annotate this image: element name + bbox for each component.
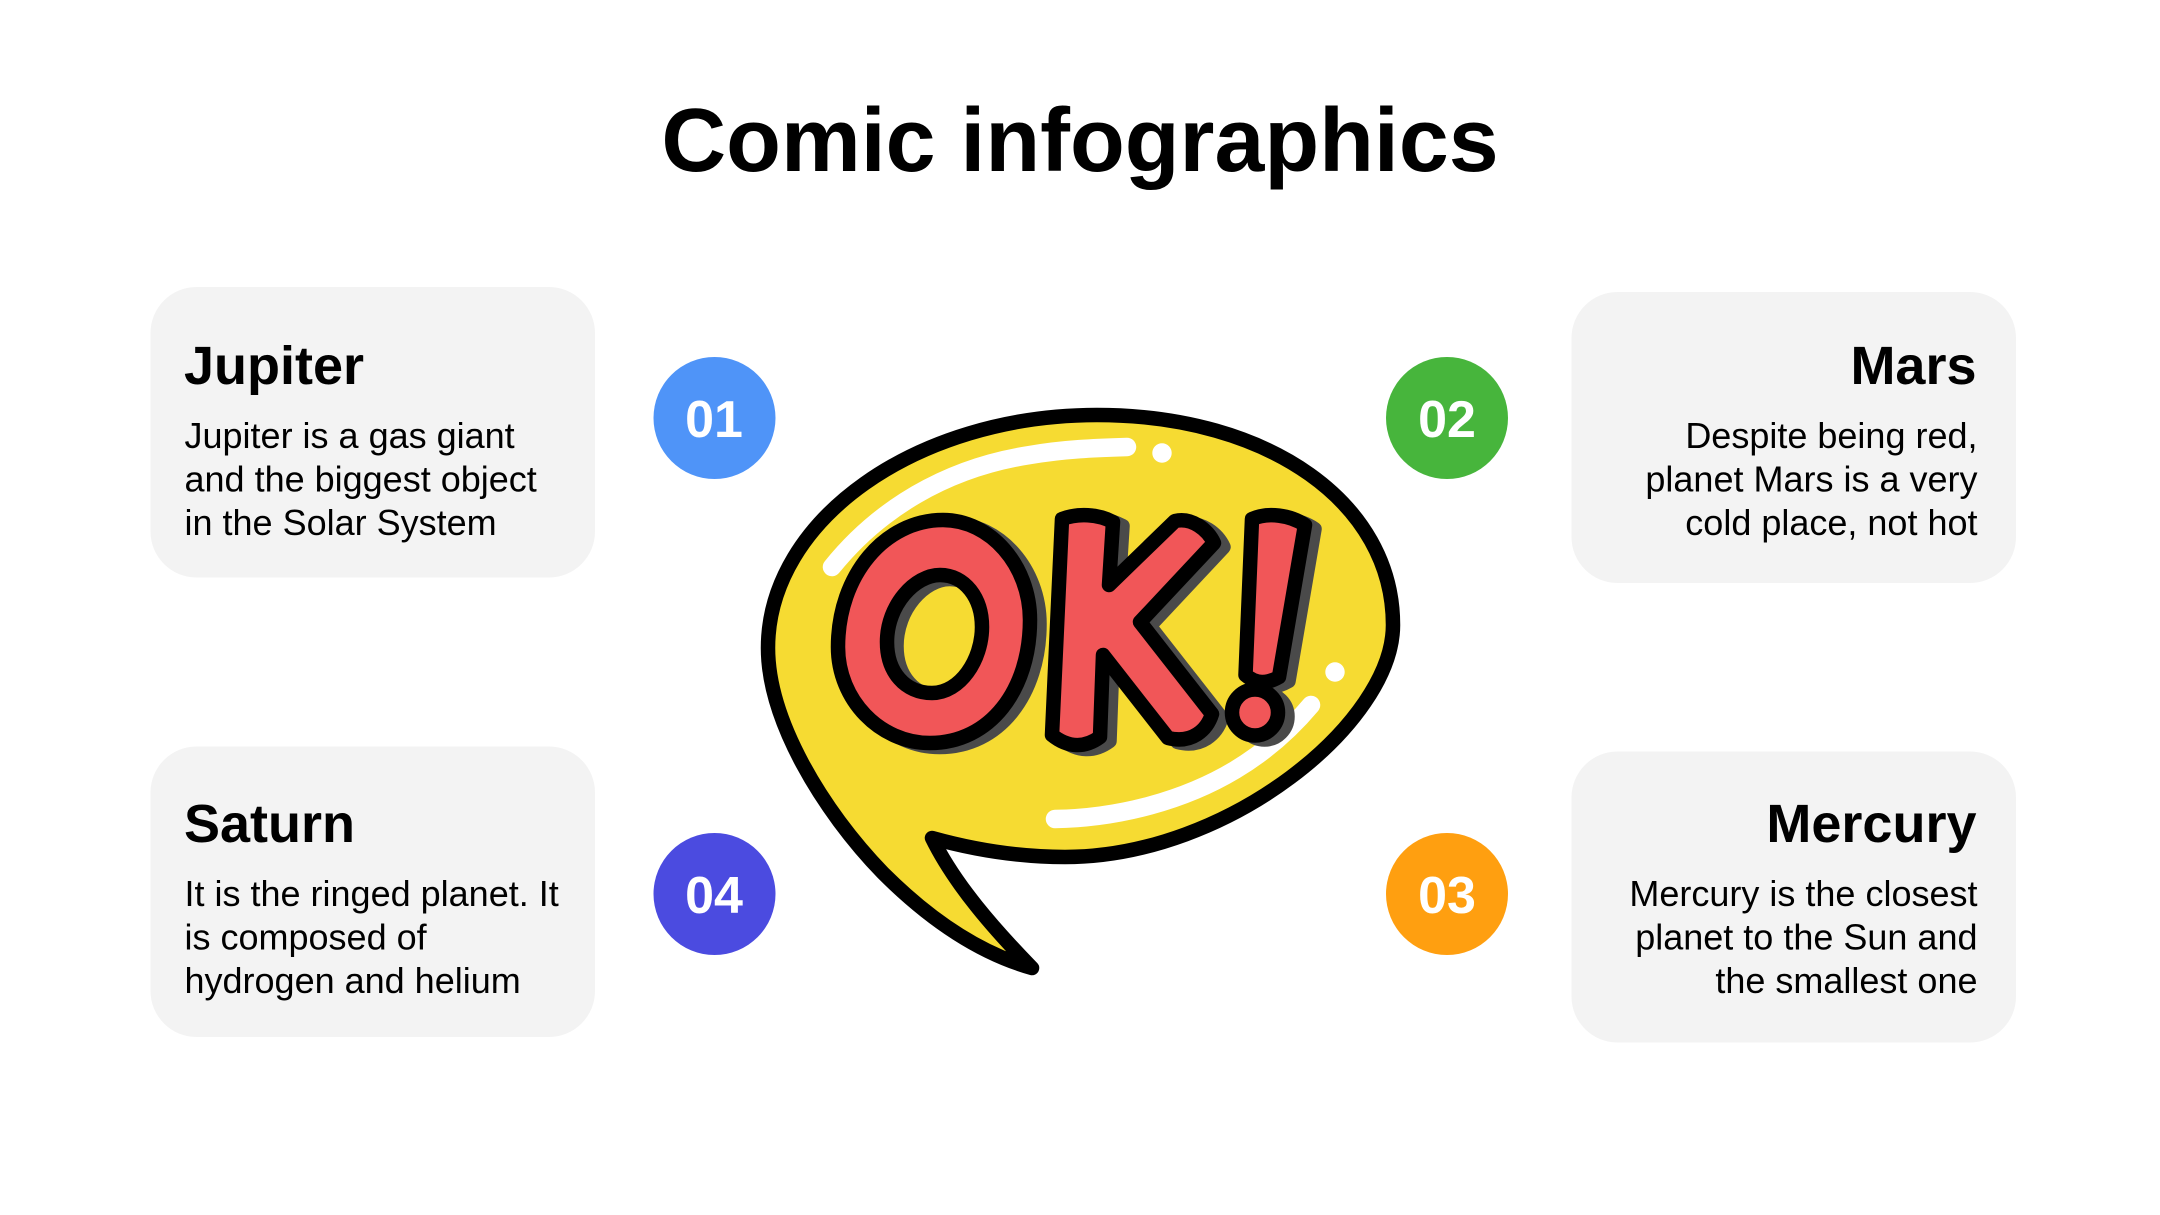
badge: 04 bbox=[654, 833, 776, 955]
letter shadows bbox=[848, 519, 1314, 749]
bubble highlights bbox=[832, 443, 1345, 819]
panel: Jupiter bbox=[150, 287, 595, 578]
text: Jupiter description: and the biggest object bbox=[184, 458, 537, 500]
exclamation mark bbox=[1232, 515, 1305, 736]
title: Comic infographics bbox=[661, 91, 1499, 191]
heading: Mars: Mars bbox=[1850, 336, 1976, 396]
speech bubble body bbox=[768, 415, 1393, 968]
text: Jupiter description: in the Solar System bbox=[184, 502, 497, 543]
badge: 02 bbox=[1386, 357, 1508, 479]
panel: Mercury bbox=[1572, 752, 2016, 1042]
text: Mercury description bbox=[1629, 873, 1978, 1001]
illustration: OK speech bubble bbox=[768, 415, 1393, 968]
text: Mars description: cold place, not hot bbox=[1685, 502, 1978, 543]
text: Saturn description: is composed of bbox=[184, 916, 428, 958]
text: Jupiter description bbox=[184, 415, 537, 543]
text: Saturn description: It is the ringed planet. It bbox=[184, 873, 559, 914]
text: Saturn description bbox=[184, 873, 559, 1001]
badge: 02: 02 bbox=[1418, 391, 1476, 449]
text: Mars description bbox=[1645, 415, 1978, 543]
badge: 03: 03 bbox=[1418, 867, 1476, 925]
text: Saturn description: hydrogen and helium bbox=[184, 960, 521, 1001]
text: Jupiter description: Jupiter is a gas giant bbox=[184, 415, 515, 456]
badge: 01: 01 bbox=[685, 391, 743, 449]
panel: Saturn bbox=[150, 746, 595, 1037]
heading: Mercury: Mercury bbox=[1766, 794, 1976, 854]
text: Mercury description: the smallest one bbox=[1715, 960, 1978, 1001]
text: Mars description: planet Mars is a very bbox=[1645, 458, 1978, 500]
panel: Mars bbox=[1572, 292, 2016, 583]
letter O bbox=[838, 520, 1030, 743]
letter K bbox=[1052, 515, 1214, 745]
heading: Jupiter: Jupiter bbox=[184, 336, 364, 396]
heading: Saturn: Saturn bbox=[184, 794, 355, 854]
text: Mars description: Despite being red, bbox=[1685, 415, 1978, 456]
text: Mercury description: Mercury is the closest bbox=[1629, 873, 1978, 914]
badge: 04: 04 bbox=[685, 867, 743, 925]
text: Mercury description: planet to the Sun and bbox=[1635, 916, 1978, 958]
badge: 01 bbox=[654, 357, 776, 479]
badge: 03 bbox=[1386, 833, 1508, 955]
